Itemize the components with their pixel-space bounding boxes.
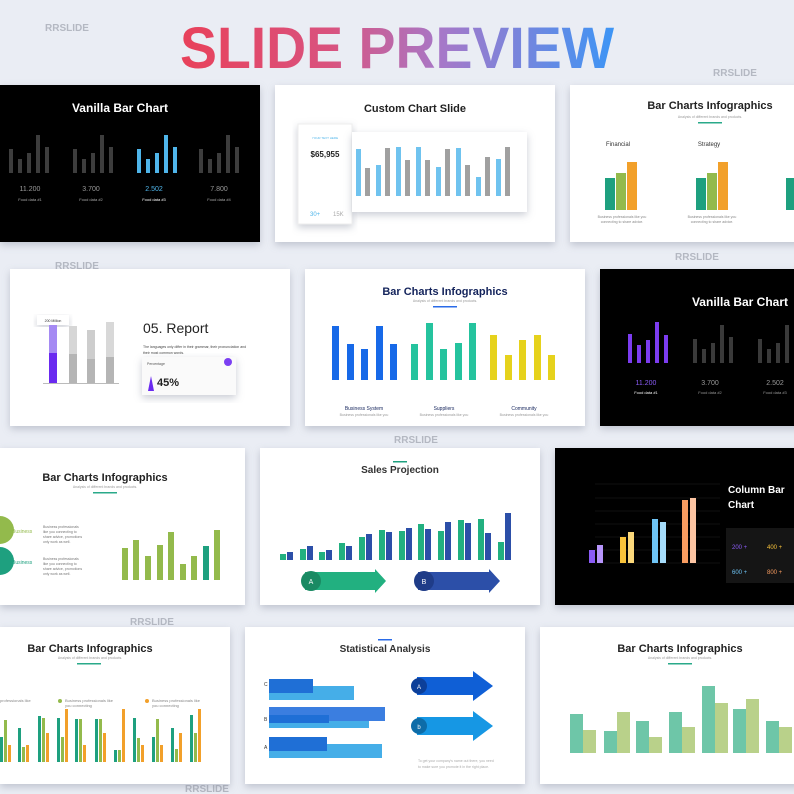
slide: custom chart slide: YOUR TEXT HERE: [312, 136, 338, 140]
slide: 05 report: Percentage: [147, 362, 165, 366]
slide: column bar chart dark: Chart: [728, 500, 755, 511]
watermarks: RRSLIDE: [55, 261, 99, 272]
slide: statistical analysis: To get your company's name out there, you need: [418, 759, 494, 763]
slide: bar charts infographics (row3 left): like you connecting to: [43, 530, 77, 534]
slide: bar charts infographics (row2 center): Business professionals like you: [420, 413, 468, 417]
arrow A: [301, 569, 386, 593]
arrow B: B: [422, 579, 427, 586]
watermarks: RRSLIDE: [130, 617, 174, 628]
slide: bar charts infographics (row4 left): Business professionals like: [152, 698, 201, 703]
slide: bar charts infographics (row3 left): share advice, promotions: [43, 535, 82, 539]
slide: vanilla bar chart dark (row1): [0, 85, 260, 242]
slide: statistical analysis: [245, 627, 525, 784]
slide: bar charts infographics (row4 right): Analysis of different brands and products.: [648, 656, 712, 660]
watermarks: RRSLIDE: [675, 252, 719, 263]
slide: vanilla bar chart dark (row1): Food data #2: [79, 197, 104, 202]
slide: vanilla bar chart dark (row1): 3.700: [82, 186, 100, 193]
slide: vanilla bar chart dark (row2): Food data #2: [698, 390, 723, 395]
slide: 05 report: 200 Million: [45, 319, 61, 323]
slide: bar charts infographics (row1): [570, 85, 794, 242]
arrow b: b: [417, 725, 421, 731]
slide: vanilla bar chart dark (row1): Food data #1: [18, 197, 43, 202]
slide: column bar chart dark: [555, 448, 794, 605]
arrow A: [411, 671, 493, 701]
arrow A: A: [309, 579, 314, 586]
slide: bar charts infographics (row1): Strategy: [698, 142, 720, 148]
slide: 05 report: 45%: [157, 377, 179, 389]
slide: statistical analysis: A: [264, 745, 268, 751]
slide: bar charts infographics (row4 right): Bar Charts Infographics: [617, 643, 743, 655]
slide: vanilla bar chart dark (row2): [600, 269, 794, 426]
slide: column bar chart dark: 200 +: [732, 545, 748, 551]
slide: column bar chart dark: 800 +: [767, 570, 783, 576]
slide: bar charts infographics (row1): connecting to share advice.: [601, 220, 643, 224]
slide: bar charts infographics (row2 center): Bar Charts Infographics: [382, 286, 508, 298]
slide: vanilla bar chart dark (row1): 7.800: [210, 186, 228, 193]
slide: bar charts infographics (row3 left): Analysis of different brands and products.: [73, 485, 137, 489]
slide: bar charts infographics (row1): Analysis of different brands and products.: [678, 115, 742, 119]
slide: bar charts infographics (row2 center): Business professionals like you: [340, 413, 388, 417]
slide: vanilla bar chart dark (row2): 3.700: [701, 380, 719, 387]
slide: 05 report: their most common words.: [143, 351, 184, 355]
slide: bar charts infographics (row4 left): professionals like: [0, 698, 31, 703]
slide: sales projection: Sales Projection: [361, 465, 439, 476]
slide: vanilla bar chart dark (row1): Food data #4: [207, 197, 232, 202]
slide: bar charts infographics (row3 left): Business professionals: [43, 557, 79, 561]
slide: bar charts infographics (row1): connecting to share advice.: [691, 220, 733, 224]
arrow b: [411, 711, 493, 741]
slide: bar charts infographics (row3 left): only work as well.: [43, 572, 70, 576]
slide: column bar chart dark: 400 +: [767, 545, 783, 551]
slide: bar charts infographics (row2 center): Business System: [345, 406, 383, 412]
slide: bar charts infographics (row3 left): only work as well.: [43, 540, 70, 544]
slide: vanilla bar chart dark (row2): 11.200: [636, 380, 657, 387]
slide: vanilla bar chart dark (row2): 2.502: [766, 380, 784, 387]
slide: vanilla bar chart dark (row1): Vanilla Bar Chart: [72, 101, 168, 115]
slide: vanilla bar chart dark (row2): Vanilla Bar Chart: [692, 295, 788, 309]
slide: vanilla bar chart dark (row2): Food data #3: [763, 390, 788, 395]
arrow A: A: [417, 685, 421, 691]
slide: custom chart slide: Custom Chart Slide: [364, 103, 466, 115]
slide: bar charts infographics (row3 left): Business professionals: [43, 525, 79, 529]
slide: custom chart slide: 30+: [310, 212, 321, 218]
watermarks: RRSLIDE: [45, 23, 89, 34]
slide: bar charts infographics (row3 left): [0, 448, 245, 605]
slide: bar charts infographics (row4 left): Bar Charts Infographics: [27, 643, 153, 655]
slide: bar charts infographics (row2 center): Business professionals like you: [500, 413, 548, 417]
slide: statistical analysis: B: [264, 717, 268, 723]
slide: bar charts infographics (row2 center): Suppliers: [434, 406, 455, 412]
slide: 05 report: 05. Report: [143, 320, 208, 336]
watermarks: RRSLIDE: [713, 68, 757, 79]
slide: bar charts infographics (row1): Bar Charts Infographics: [647, 100, 773, 112]
slide: vanilla bar chart dark (row1): 2.502: [145, 186, 163, 193]
slide: bar charts infographics (row1): Business professionals like you: [598, 215, 646, 219]
slide: statistical analysis: Statistical Analysis: [340, 644, 431, 655]
slide: bar charts infographics (row2 center): [305, 269, 585, 426]
slide: bar charts infographics (row1): Business professionals like you: [688, 215, 736, 219]
slide: bar charts infographics (row3 left): Bar Charts Infographics: [42, 472, 168, 484]
slide: bar charts infographics (row3 left): like you connecting to: [43, 562, 77, 566]
slide: vanilla bar chart dark (row1): Food data #3: [142, 197, 167, 202]
slide: bar charts infographics (row2 center): Community: [511, 406, 537, 412]
slide: bar charts infographics (row4 left): Business professionals like: [65, 698, 114, 703]
slide: bar charts infographics (row2 center): Analysis of different brands and products.: [413, 299, 477, 303]
slide: statistical analysis: to make sure you promote it in the right place.: [418, 765, 489, 769]
slide: bar charts infographics (row4 left): you connecting: [65, 703, 92, 708]
slide: bar charts infographics (row1): Financial: [606, 142, 630, 148]
slide: custom chart slide: 15K: [333, 212, 344, 218]
slide: bar charts infographics (row3 left): Business: [12, 529, 33, 535]
slide: column bar chart dark: 600 +: [732, 570, 748, 576]
slide: bar charts infographics (row4 left): Analysis of different brands and products.: [58, 656, 122, 660]
slide: bar charts infographics (row3 left): share advice, promotions: [43, 567, 82, 571]
slide: column bar chart dark: Column Bar: [728, 485, 785, 496]
slide: statistical analysis: C: [264, 682, 268, 688]
slide: vanilla bar chart dark (row1): 11.200: [20, 186, 41, 193]
slide: bar charts infographics (row3 left): Business: [12, 560, 33, 566]
arrow B: [414, 569, 500, 593]
slide: custom chart slide: [275, 85, 555, 242]
slide: 05 report: [10, 269, 290, 426]
watermarks: RRSLIDE: [394, 435, 438, 446]
slide: custom chart slide: $65,955: [311, 150, 340, 159]
slide: bar charts infographics (row4 left): [0, 627, 230, 784]
title: SLIDE PREVIEW: [180, 16, 614, 81]
slide: bar charts infographics (row4 left): you connecting: [152, 703, 179, 708]
slide: vanilla bar chart dark (row2): Food data #1: [634, 390, 659, 395]
slide: 05 report: The languages only differ in their grammar, their pronunciation and: [143, 345, 246, 349]
slide: bar charts infographics (row4 right): [540, 627, 794, 784]
slide: sales projection: [260, 448, 540, 605]
